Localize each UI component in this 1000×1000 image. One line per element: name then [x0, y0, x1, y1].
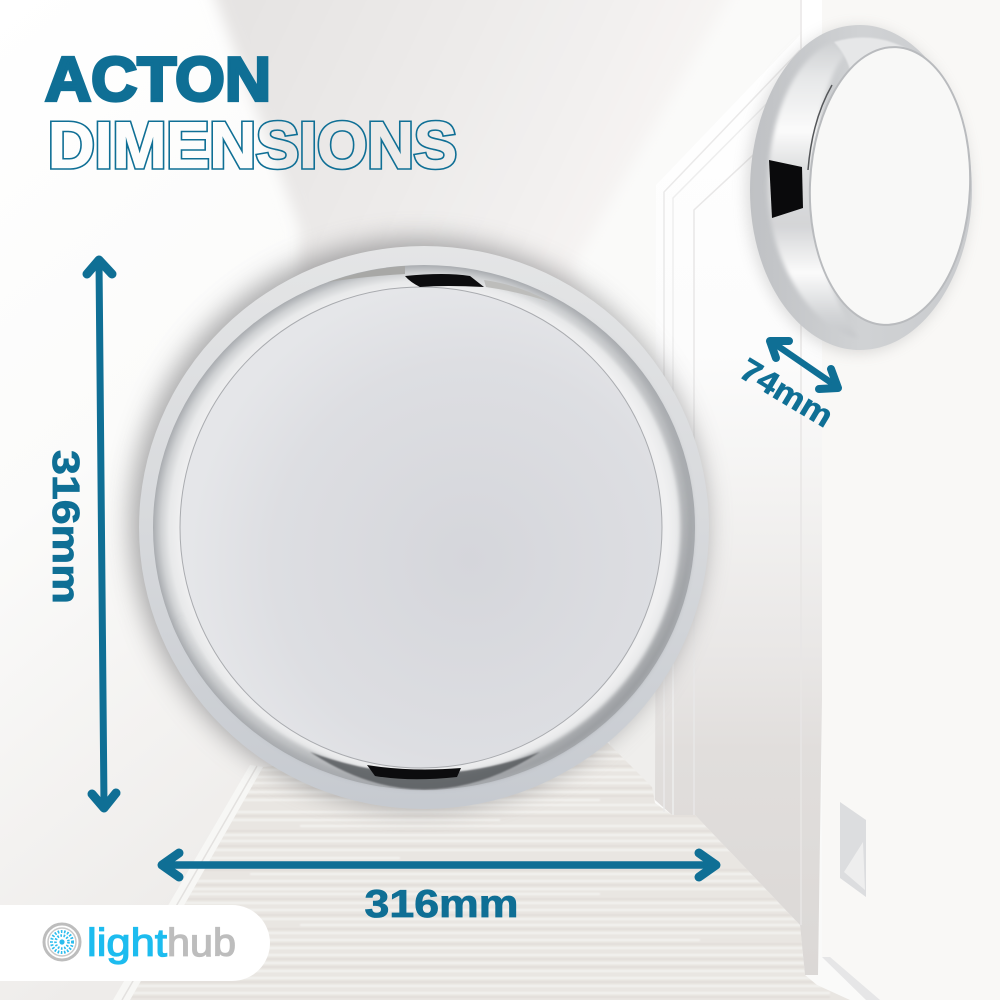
label: 74mm: 74mm [734, 351, 840, 434]
title: DIMENSIONS: DIMENSIONS [48, 108, 457, 182]
skirting: left [113, 765, 263, 1000]
bottom chrome highlight [310, 752, 540, 790]
arrow: horizontal width [162, 853, 716, 877]
lens [180, 287, 662, 768]
arrow: vertical height [87, 260, 116, 808]
wall socket plate [840, 802, 866, 897]
top chrome highlight [328, 266, 550, 302]
main lamp: front view [131, 239, 709, 809]
logo pill [0, 905, 270, 981]
chrome shell [768, 42, 858, 338]
logo wordmark: light [87, 922, 167, 965]
chrome reflection [769, 160, 803, 218]
chrome ring [153, 265, 695, 790]
floor [100, 743, 850, 1000]
door and frame [655, 0, 822, 975]
skirting: right [822, 957, 880, 1000]
label: horizontal 316mm: 316mm [364, 883, 518, 926]
label: vertical 316mm: 316mm [44, 450, 86, 604]
title: ACTON: ACTON [45, 46, 271, 114]
logo pill: hub [167, 922, 236, 965]
icon: lighthub logo mark [44, 924, 80, 960]
arrow: depth [770, 341, 838, 389]
ring shading: lower right [161, 272, 687, 782]
side lamp: angled view [746, 25, 977, 353]
right wall [822, 0, 1000, 1000]
outer band [139, 246, 709, 809]
